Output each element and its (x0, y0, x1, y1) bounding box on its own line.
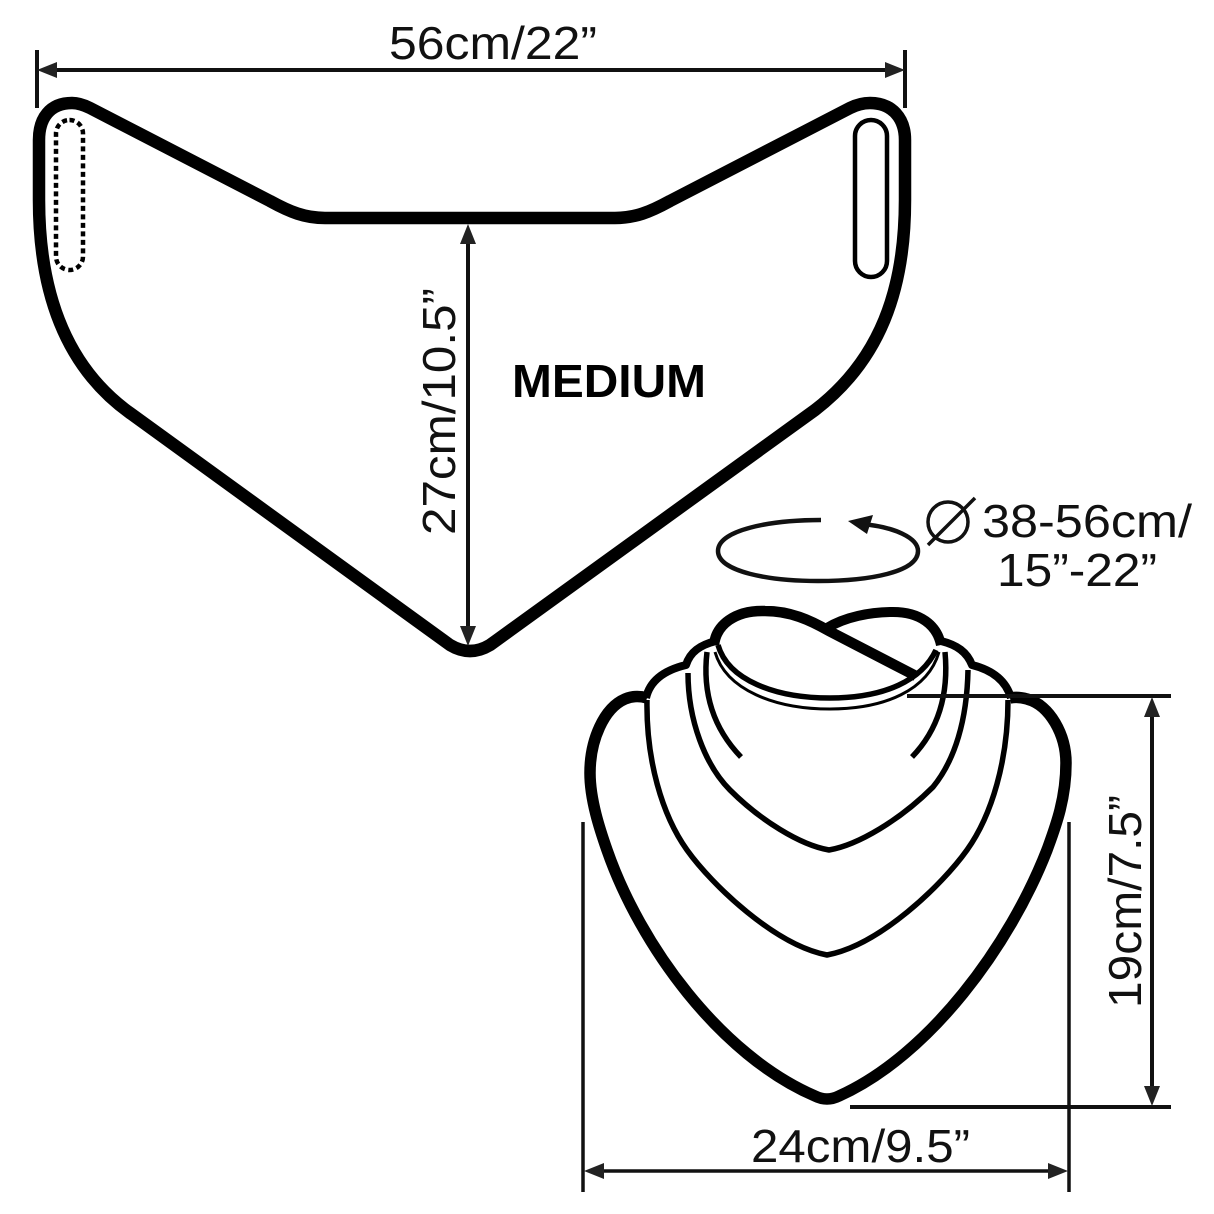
diameter symbol (928, 498, 975, 545)
right scallops (941, 641, 1011, 698)
top width dimension: 56cm/22” (389, 17, 597, 69)
worn height dimension: 19cm/7.5” (1099, 795, 1151, 1008)
top height dimension (413, 224, 476, 646)
left scallops (646, 641, 716, 698)
layer three edge (688, 670, 968, 850)
dashed snap slot (56, 120, 83, 270)
neck size text (982, 495, 1192, 596)
neck circumference icon (718, 515, 918, 581)
size label: MEDIUM (512, 355, 706, 407)
front collar with strap (714, 611, 916, 676)
neck size text: 38-56cm/ (982, 495, 1192, 547)
neck size text: 15”-22” (997, 544, 1157, 596)
right tail line (912, 652, 946, 757)
top height dimension: 27cm/10.5” (413, 288, 465, 535)
top width dimension (37, 17, 905, 108)
layer two edge (647, 700, 1008, 955)
outer edge (590, 697, 1066, 1099)
worn width dimension: 24cm/9.5” (751, 1120, 970, 1172)
worn width dimension (583, 822, 1069, 1192)
rear collar (827, 612, 941, 645)
neck inner line (718, 645, 936, 698)
left tail line (706, 652, 741, 757)
worn bandana illustration (590, 611, 1066, 1099)
neck outer line (715, 652, 939, 709)
solid snap slot (855, 120, 887, 277)
top bandana flat outline (39, 103, 905, 651)
worn height dimension (850, 696, 1171, 1107)
